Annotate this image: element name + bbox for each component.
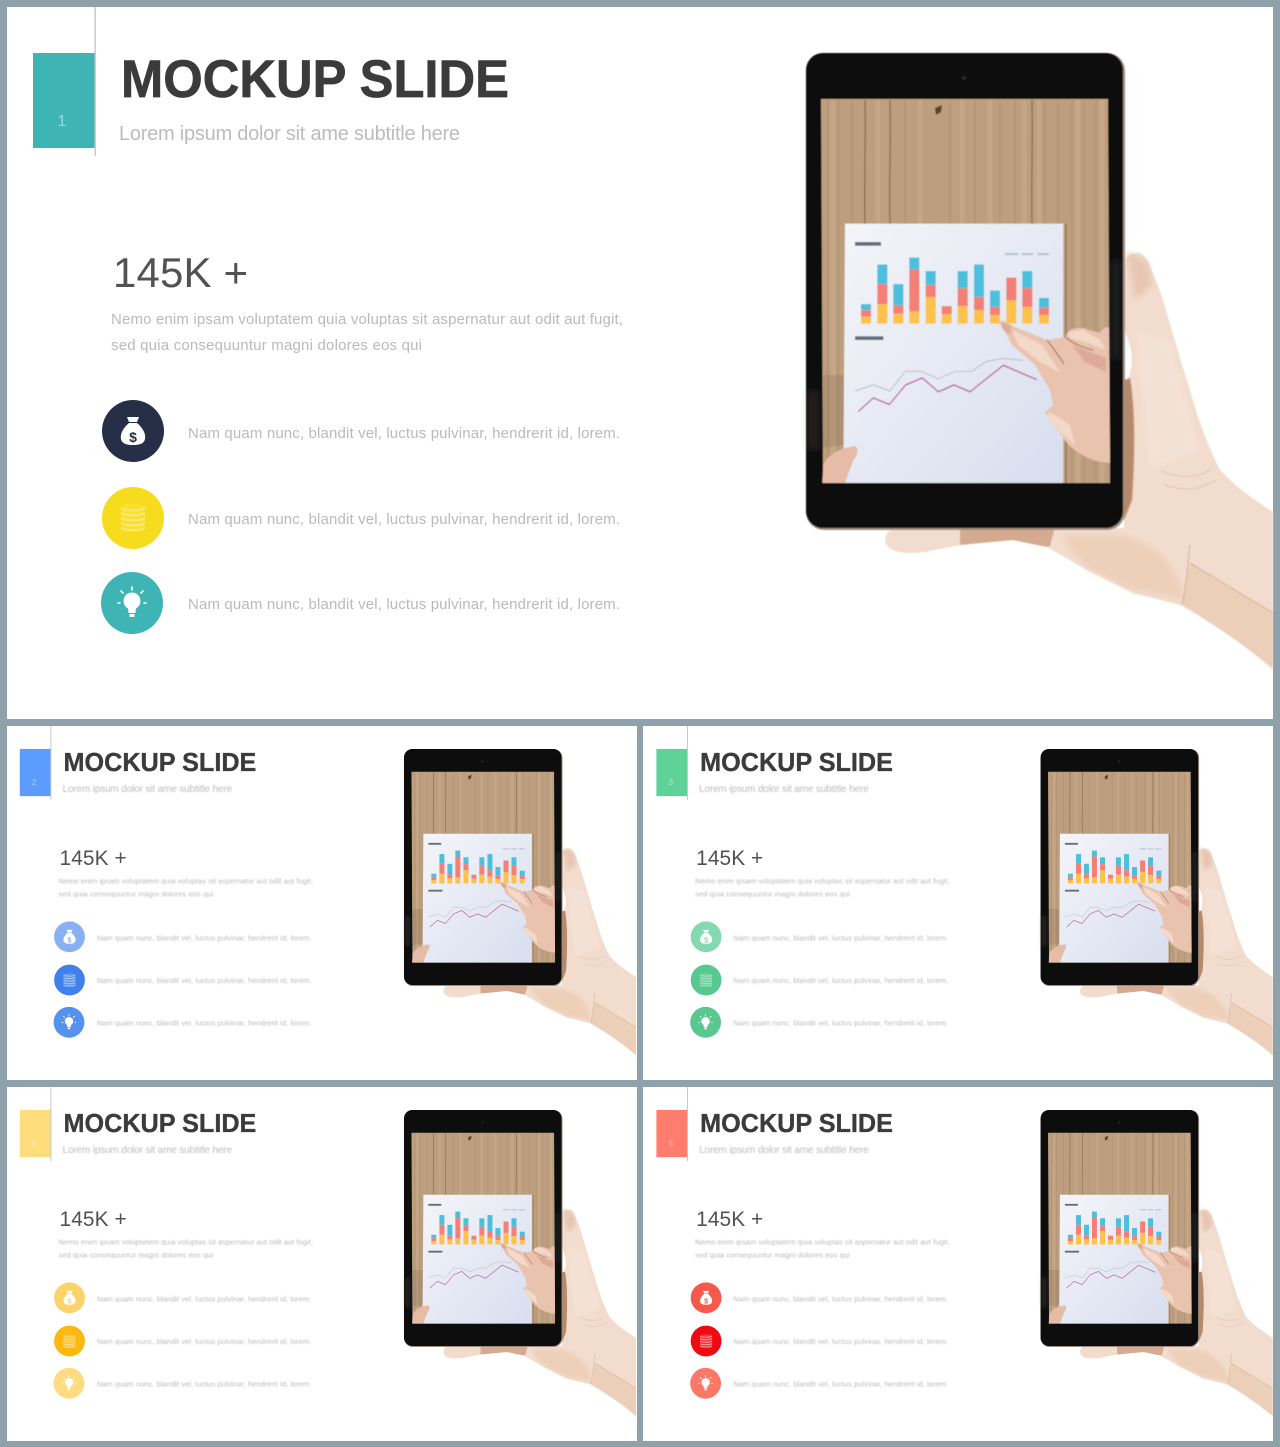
tablet held in hand bbox=[806, 53, 1273, 670]
panel: main slide 1 bbox=[7, 7, 1273, 719]
slide number tab: 1 bbox=[58, 113, 67, 130]
description: sed quia consequuntur magni dolores eos qui bbox=[59, 890, 213, 899]
title: MOCKUP SLIDE bbox=[700, 747, 893, 777]
slide number tab bbox=[20, 1087, 51, 1161]
subtitle: Lorem ipsum dolor sit ame subtitle here bbox=[699, 1145, 869, 1156]
description bbox=[695, 877, 950, 899]
description bbox=[695, 1238, 950, 1260]
icon: money bag: $ bbox=[68, 1298, 72, 1305]
icon: money bag: $ bbox=[704, 937, 708, 944]
list item 1: Nam quam nunc, blandit vel, luctus pulvinar, hendrerit id, lorem. bbox=[97, 1294, 312, 1303]
icon: coins bbox=[102, 487, 164, 549]
list item 1: Nam quam nunc, blandit vel, luctus pulvinar, hendrerit id, lorem. bbox=[733, 933, 948, 942]
description: Nemo enim ipsam voluptatem quia voluptas sit aspernatur aut odit aut fugit, bbox=[59, 877, 313, 886]
description: sed quia consequuntur magni dolores eos qui bbox=[695, 1251, 850, 1260]
slide number tab bbox=[656, 726, 688, 800]
list item 3: Nam quam nunc, blandit vel, luctus pulvinar, hendrerit id, lorem. bbox=[733, 1379, 948, 1388]
slide number tab bbox=[33, 7, 96, 156]
title: MOCKUP SLIDE bbox=[121, 50, 509, 109]
icon: money bag bbox=[54, 921, 85, 952]
list item 3: Nam quam nunc, blandit vel, luctus pulvinar, hendrerit id, lorem. bbox=[97, 1018, 312, 1027]
icon: coins bbox=[691, 965, 722, 995]
subtitle: Lorem ipsum dolor sit ame subtitle here bbox=[63, 1145, 232, 1156]
tablet held in hand bbox=[404, 749, 636, 1056]
icon: light bulb bbox=[690, 1368, 721, 1399]
list item 2: Nam quam nunc, blandit vel, luctus pulvinar, hendrerit id, lorem. bbox=[733, 976, 948, 985]
list item 1: Nam quam nunc, blandit vel, luctus pulvinar, hendrerit id, lorem. bbox=[733, 1294, 948, 1303]
subtitle: Lorem ipsum dolor sit ame subtitle here bbox=[119, 123, 460, 145]
icon: money bag: $ bbox=[68, 937, 72, 944]
big number: 145K + bbox=[113, 249, 248, 296]
big number: 145K + bbox=[696, 1208, 763, 1231]
list item 2: Nam quam nunc, blandit vel, luctus pulvinar, hendrerit id, lorem. bbox=[97, 976, 312, 985]
list item 2: Nam quam nunc, blandit vel, luctus pulvinar, hendrerit id, lorem. bbox=[733, 1337, 948, 1346]
description: Nemo enim ipsam voluptatem quia voluptas sit aspernatur aut odit aut fugit, bbox=[695, 877, 950, 886]
description: Nemo enim ipsam voluptatem quia voluptas sit aspernatur aut odit aut fugit, bbox=[59, 1238, 313, 1247]
description bbox=[59, 877, 313, 899]
slide number tab: 3 bbox=[669, 778, 674, 787]
icon: light bulb bbox=[54, 1007, 84, 1038]
list item 3: Nam quam nunc, blandit vel, luctus pulvinar, hendrerit id, lorem. bbox=[188, 596, 620, 613]
icon: coins bbox=[691, 1326, 722, 1356]
panel: slide 3 green bbox=[643, 726, 1273, 1080]
big number: 145K + bbox=[696, 847, 763, 870]
icon: money bag: $ bbox=[704, 1298, 708, 1305]
tablet held in hand bbox=[1041, 749, 1273, 1056]
list item 2: Nam quam nunc, blandit vel, luctus pulvinar, hendrerit id, lorem. bbox=[188, 511, 620, 528]
description: sed quia consequuntur magni dolores eos qui bbox=[695, 890, 850, 899]
title: MOCKUP SLIDE bbox=[64, 1108, 256, 1138]
icon: light bulb bbox=[54, 1368, 84, 1399]
list item 1: Nam quam nunc, blandit vel, luctus pulvinar, hendrerit id, lorem. bbox=[188, 425, 620, 442]
panel: slide 5 red bbox=[643, 1087, 1273, 1441]
description: sed quia consequuntur magni dolores eos qui bbox=[59, 1251, 213, 1260]
icon: light bulb bbox=[101, 572, 163, 634]
icon: coins bbox=[54, 965, 85, 995]
slide number tab bbox=[656, 1087, 688, 1161]
slide number tab: 4 bbox=[32, 1139, 37, 1148]
icon: money bag bbox=[691, 1282, 722, 1313]
big number: 145K + bbox=[60, 1208, 127, 1231]
title: MOCKUP SLIDE bbox=[64, 747, 256, 777]
icon: money bag bbox=[691, 921, 722, 952]
description bbox=[59, 1238, 313, 1260]
tablet held in hand bbox=[1041, 1110, 1273, 1417]
icon: light bulb bbox=[690, 1007, 721, 1038]
description: Nemo enim ipsam voluptatem quia voluptas sit aspernatur aut odit aut fugit, bbox=[695, 1238, 950, 1247]
panel: slide 2 blue bbox=[7, 726, 637, 1080]
list item 3: Nam quam nunc, blandit vel, luctus pulvinar, hendrerit id, lorem. bbox=[97, 1379, 312, 1388]
tablet held in hand bbox=[404, 1110, 636, 1417]
description: Nemo enim ipsam voluptatem quia voluptas sit aspernatur aut odit aut fugit, bbox=[111, 311, 623, 328]
slide number tab bbox=[20, 726, 51, 800]
icon: money bag: $ bbox=[129, 429, 137, 445]
panel: slide 4 yellow bbox=[7, 1087, 637, 1441]
list item 2: Nam quam nunc, blandit vel, luctus pulvinar, hendrerit id, lorem. bbox=[97, 1337, 312, 1346]
icon: coins bbox=[54, 1326, 85, 1356]
icon: money bag bbox=[54, 1282, 85, 1313]
title: MOCKUP SLIDE bbox=[700, 1108, 893, 1138]
subtitle: Lorem ipsum dolor sit ame subtitle here bbox=[63, 784, 232, 795]
list item 3: Nam quam nunc, blandit vel, luctus pulvinar, hendrerit id, lorem. bbox=[733, 1018, 948, 1027]
description: sed quia consequuntur magni dolores eos qui bbox=[111, 337, 422, 354]
icon: money bag bbox=[102, 400, 164, 462]
slide number tab: 2 bbox=[32, 778, 37, 787]
subtitle: Lorem ipsum dolor sit ame subtitle here bbox=[699, 784, 869, 795]
description bbox=[111, 311, 623, 354]
big number: 145K + bbox=[60, 847, 127, 870]
list item 1: Nam quam nunc, blandit vel, luctus pulvinar, hendrerit id, lorem. bbox=[97, 933, 312, 942]
slide number tab: 5 bbox=[669, 1139, 674, 1148]
